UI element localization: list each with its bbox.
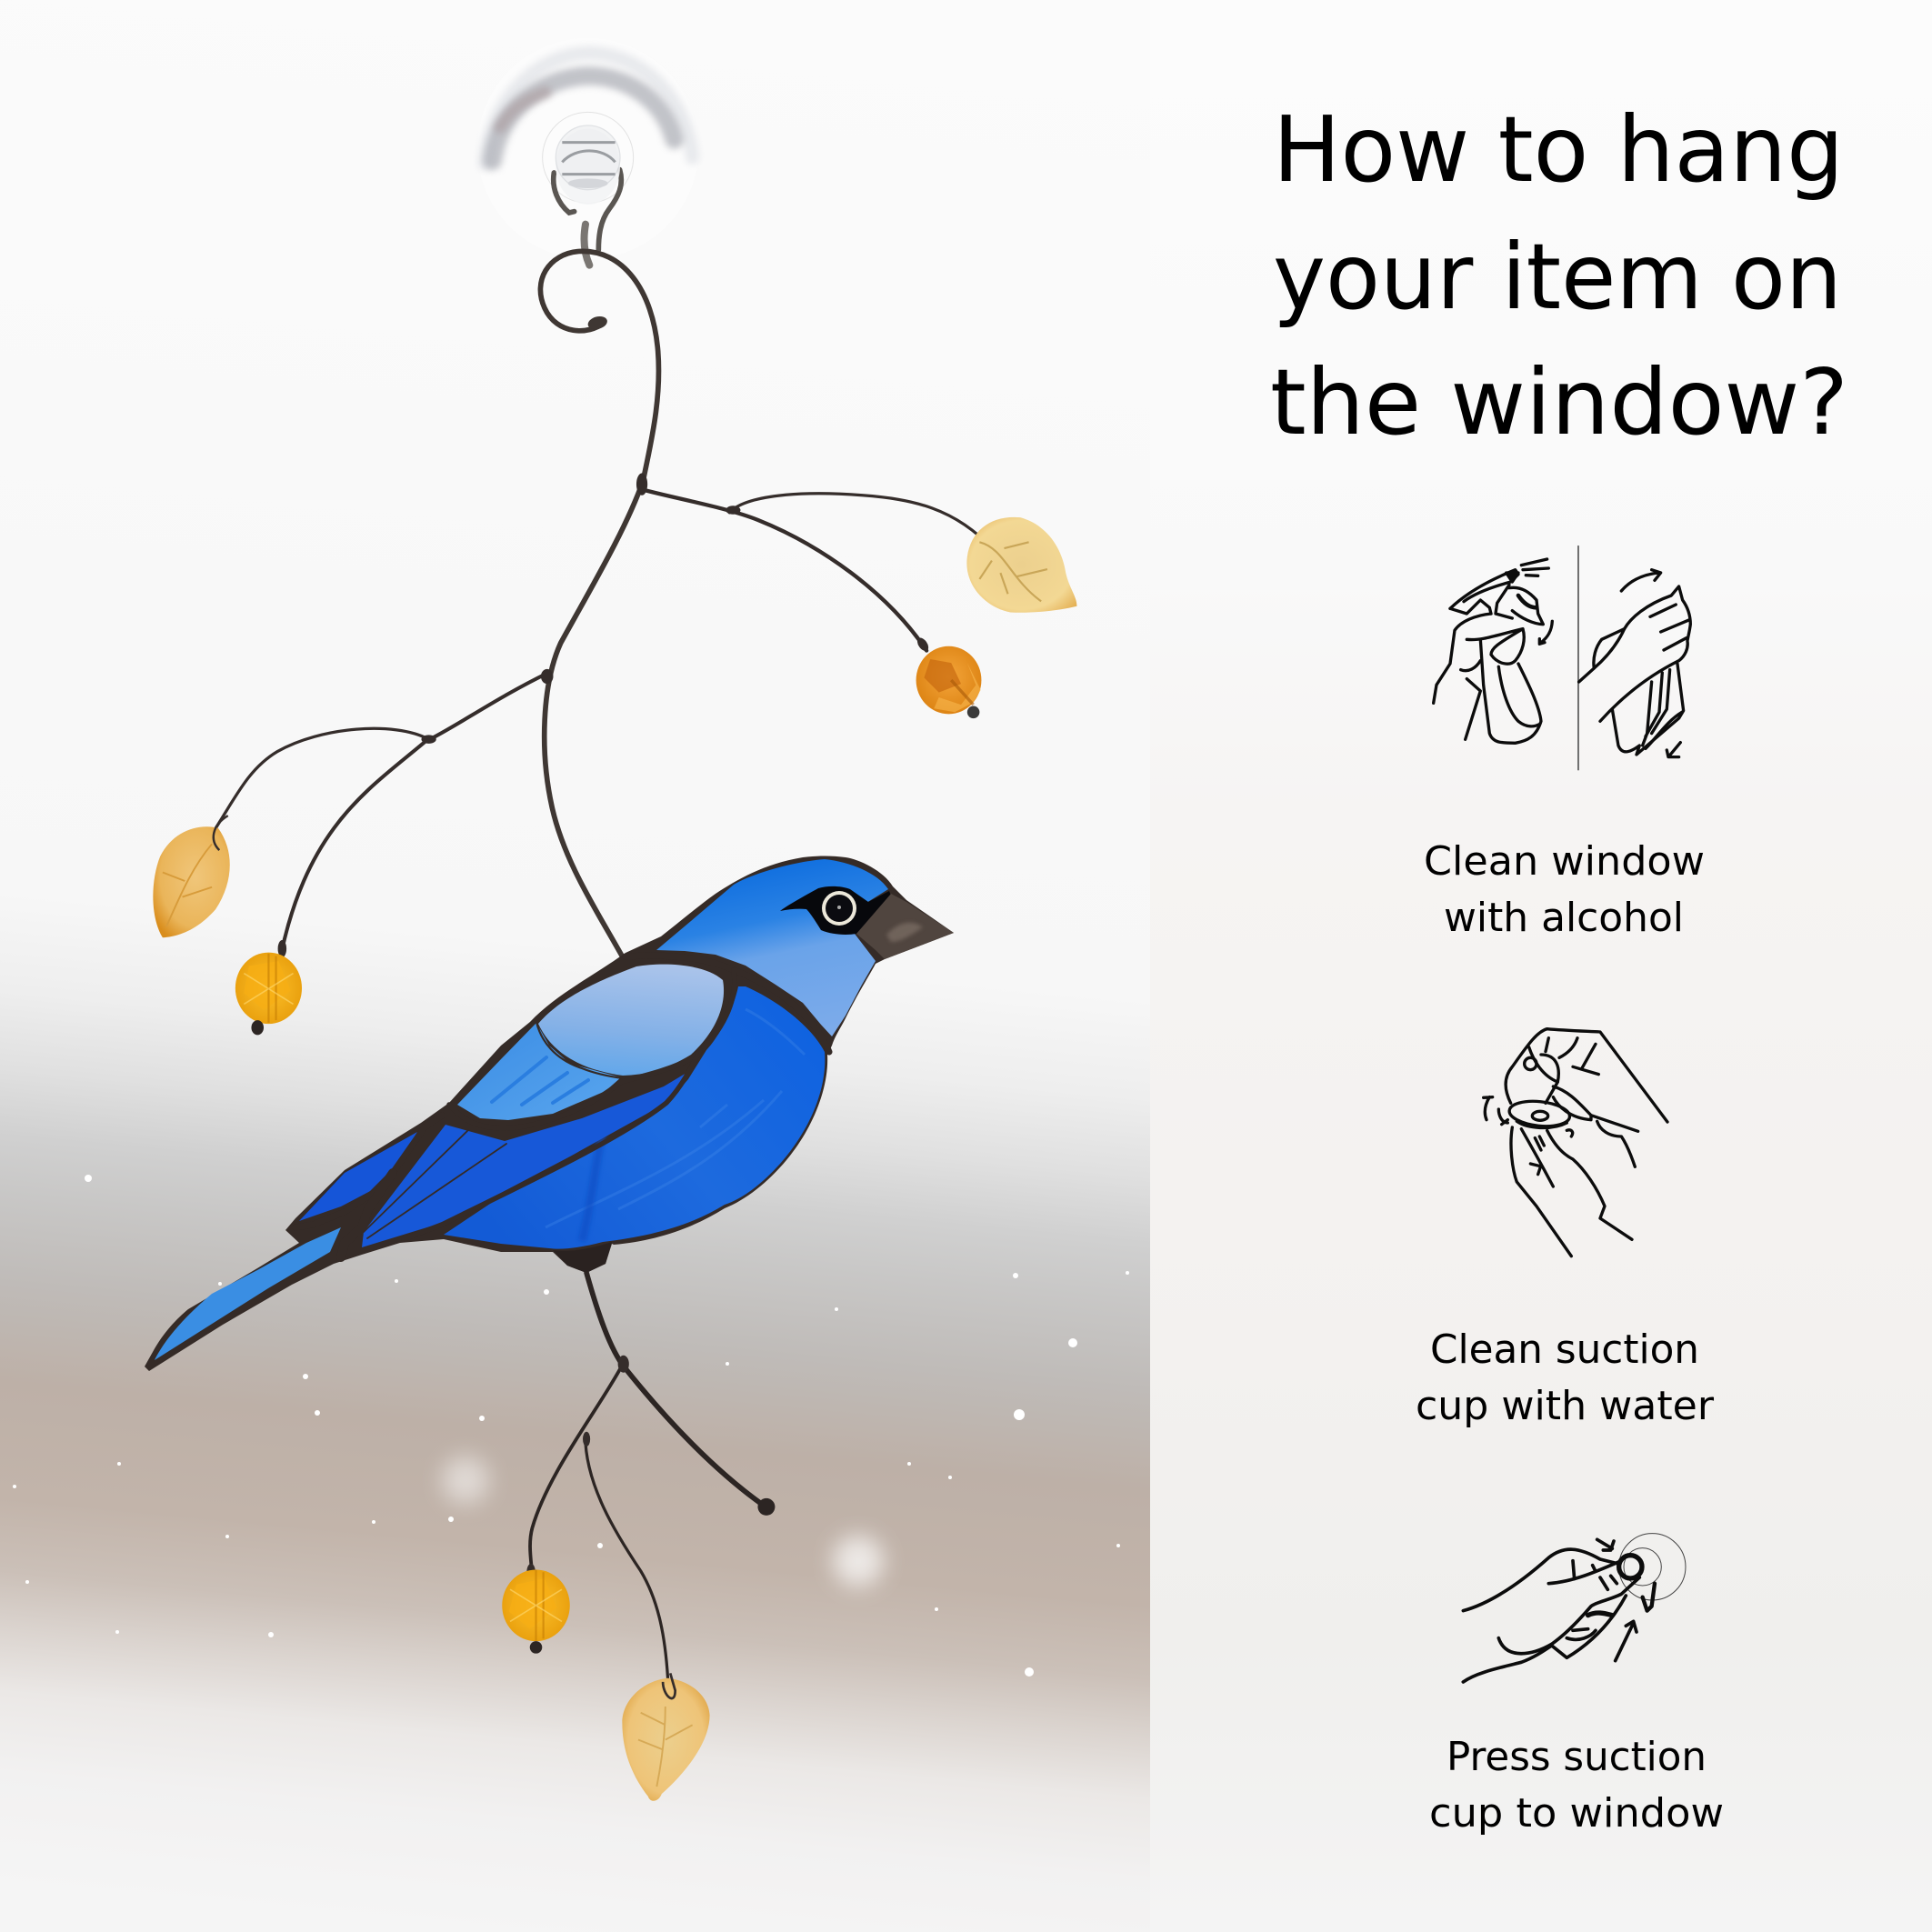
leaf: top right [966, 517, 1076, 613]
bird [145, 856, 954, 1371]
solder nodes at branch joints [278, 473, 931, 1581]
foot joint [553, 1242, 612, 1273]
icon: clean suction cup [1484, 1029, 1667, 1256]
label: press suction cup [1429, 1734, 1724, 1837]
main stem with hook [540, 251, 658, 958]
right twig [729, 494, 993, 549]
thick lead lines [295, 956, 829, 1257]
label: clean suction cup: Clean suction [1430, 1326, 1699, 1373]
back feather glass [362, 1073, 686, 1247]
icon: suction cup with hook [477, 38, 698, 265]
label: clean window: Clean window [1424, 838, 1705, 885]
hook end blob [586, 315, 608, 331]
lower left branch [530, 1366, 622, 1579]
title: your item on [1273, 224, 1842, 330]
lower sub branch [586, 1436, 668, 1678]
beak highlight [886, 923, 923, 942]
label: clean window: with alcohol [1444, 895, 1684, 941]
body streaks [546, 1009, 805, 1227]
head glass [656, 859, 888, 1036]
lower wing glass [457, 1023, 621, 1120]
panel: instructions background [1150, 0, 1932, 1932]
branches and leaves [153, 251, 1076, 1801]
left branch [281, 673, 548, 955]
lower perch branch [586, 1273, 764, 1506]
bead: orange [916, 646, 981, 718]
body glass [444, 986, 825, 1249]
wing feather marks [492, 1057, 588, 1105]
eye mask [780, 886, 891, 935]
bead: left yellow [235, 953, 302, 1035]
label: clean suction cup [1416, 1326, 1715, 1429]
left twig [209, 728, 429, 838]
icon: press suction cup [1463, 1534, 1686, 1682]
title: the window? [1270, 349, 1848, 455]
blurred snow bokeh and dust [13, 1175, 1129, 1677]
title: How to hang [1273, 96, 1844, 203]
title [1270, 96, 1848, 455]
label: clean window [1424, 838, 1705, 941]
tail feather [155, 1227, 341, 1360]
eye [822, 891, 856, 926]
leaf: left [153, 816, 230, 937]
leaf: bottom [622, 1673, 710, 1801]
right branch [641, 489, 926, 651]
label: press suction cup: cup to window [1429, 1790, 1724, 1837]
label: press suction cup: Press suction [1446, 1734, 1707, 1780]
icon: spray and wipe [1434, 546, 1690, 770]
panel: window photo [0, 0, 1150, 1932]
body vertical seam [582, 1114, 607, 1241]
upper wing glass [538, 965, 724, 1076]
rump glass [299, 1132, 417, 1221]
label: clean suction cup: cup with water [1416, 1383, 1715, 1429]
perch end blob [757, 1498, 775, 1516]
beak [856, 894, 954, 959]
bird silhouette lead [145, 856, 954, 1371]
bead: lower yellow [502, 1570, 570, 1654]
